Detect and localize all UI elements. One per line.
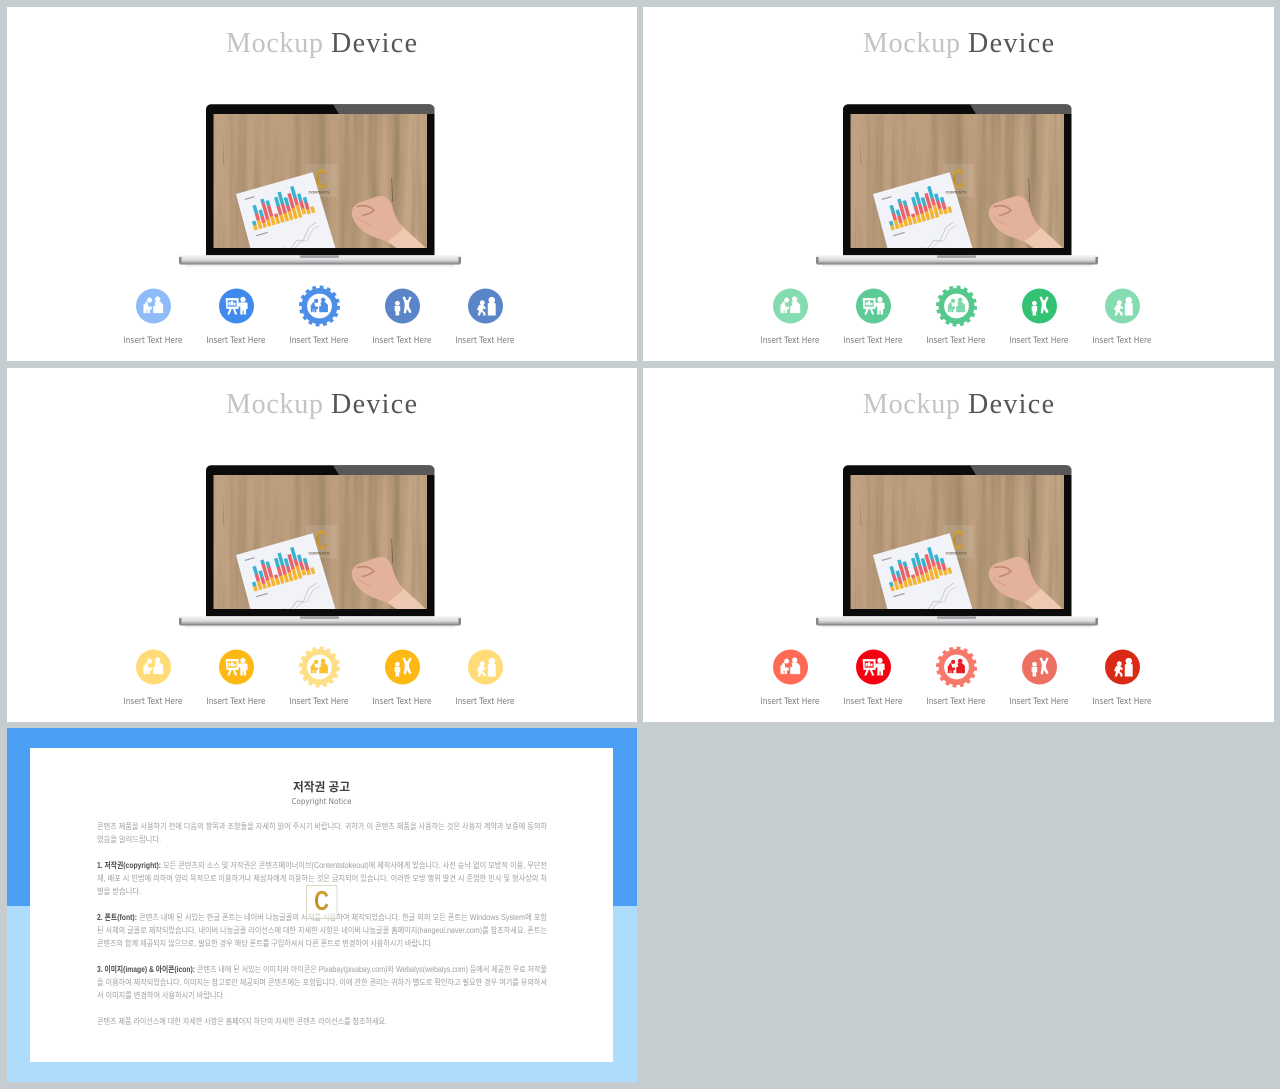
title	[226, 28, 417, 59]
section 1: copyright: 모든 콘텐츠의 소스 및 저작권은 콘텐츠메이너이브(Contentstokeout)에 제작사에게 있습니다. 사전 승낙 없이 모방적 이용, 무단전	[163, 860, 547, 870]
title: Mockup	[863, 28, 960, 59]
icon item 1	[760, 288, 820, 346]
icon item 1	[124, 288, 182, 346]
laptop mockup: CONTENTS	[946, 552, 967, 556]
section 2: font: 2. 폰트(font):	[97, 913, 137, 922]
icon item 3: gear: Insert Text Here	[926, 336, 986, 346]
icon item 2	[206, 650, 266, 707]
title	[863, 28, 1054, 59]
panel: red mockup slide	[643, 368, 1274, 722]
icon item 2: Insert Text Here	[844, 697, 902, 707]
closing line: 콘텐츠 제품 라이선스에 대한 자세한 사항은 홈페이지 하단의 자세한 콘텐츠 라이선스를 참조하세요.	[97, 1016, 387, 1026]
icon item 3: gear	[926, 648, 986, 707]
notice subheading: Copyright Notice	[292, 797, 352, 806]
logo watermark: C	[314, 886, 329, 917]
intro paragraph	[97, 821, 548, 844]
icon row	[124, 648, 514, 707]
icon item 3: gear	[290, 648, 348, 707]
icon item 1: Insert Text Here	[124, 336, 182, 346]
icon item 5: Insert Text Here	[456, 697, 514, 707]
title: Device	[968, 389, 1054, 420]
icon item 1	[760, 650, 820, 707]
icon item 3: gear: Insert Text Here	[290, 697, 348, 707]
notice heading: 저작권 공고	[293, 779, 350, 794]
title: Device	[331, 28, 417, 59]
icon item 2	[844, 650, 902, 707]
icon item 5: Insert Text Here	[456, 336, 514, 346]
laptop mockup: CONTENTS	[309, 190, 330, 194]
icon item 4: Insert Text Here	[1010, 697, 1068, 707]
icon item 2: Insert Text Here	[206, 336, 266, 346]
icon row	[760, 288, 1152, 346]
laptop mockup	[179, 104, 461, 266]
panel: blue mockup slide	[7, 7, 637, 361]
section 3: image and icon: 서 이미지를 변경하여 사용하시기 바랍니다.	[97, 990, 225, 1000]
laptop mockup: C	[316, 164, 327, 194]
icon item 4	[372, 650, 432, 707]
icon item 5	[1092, 650, 1152, 707]
icon item 3: gear: Insert Text Here	[290, 336, 348, 346]
icon item 5	[456, 288, 514, 346]
panel: green mockup slide	[643, 7, 1274, 361]
icon item 4: Insert Text Here	[372, 336, 432, 346]
title: Mockup	[863, 389, 960, 420]
icon item 3: gear	[926, 288, 986, 346]
icon item 4	[372, 288, 432, 346]
title: Device	[968, 28, 1054, 59]
laptop mockup	[179, 465, 461, 628]
section 2: font: 콘텐츠의 함께 제공되지 않으므로, 필요한 경우 해당 폰트를 구입하셔서 다른 폰트로 변경하여 사용하시기 바랍니다.	[97, 938, 433, 948]
section 3: image and icon	[97, 964, 547, 1000]
intro paragraph: 였음을 알려드립니다.	[97, 834, 161, 844]
icon item 3: gear: Insert Text Here	[926, 697, 986, 707]
title: Device	[331, 389, 417, 420]
section 2: font: 된 서체의 글꼴로 제작되었습니다. 네이버 나눔글꼴 라이선스에 대한 자세한 사항은 네이버 나눔글꼴 홈페이지(hangeul.naver.com)를 참조하세요. 폰트는	[97, 925, 547, 935]
icon item 1: Insert Text Here	[760, 336, 820, 346]
icon row	[124, 288, 514, 346]
laptop mockup	[816, 465, 1098, 628]
icon item 2	[206, 288, 266, 346]
laptop mockup: C	[953, 164, 964, 194]
icon item 4: Insert Text Here	[1010, 336, 1068, 346]
icon item 3: gear	[290, 288, 348, 346]
title: Mockup	[226, 389, 323, 420]
icon item 2: Insert Text Here	[206, 697, 266, 707]
section 1: copyright: 벌을 받습니다.	[97, 886, 141, 896]
section 1: copyright	[97, 860, 547, 896]
icon row	[760, 648, 1152, 707]
laptop mockup	[816, 104, 1098, 266]
laptop mockup: C	[953, 525, 964, 555]
section 3: image and icon: 을 이용하여 제작되었습니다. 이미지는 참고로만 제공되며 콘텐츠에는 포함됩니다. 이에 관한 권리는 귀하가 별도로 확인하고 필요한 경우 여기를 유의하셔	[97, 977, 547, 987]
section 2: font: 콘텐츠 내에 된 서있는 한글 폰트는 네이버 나눔글꼴의 서체를 사용하여 제작되었습니다. 한글 외의 모든 폰트는 Windows System에 포함	[139, 912, 548, 922]
title: Mockup	[226, 28, 323, 59]
icon item 4	[1010, 650, 1068, 707]
icon item 5: Insert Text Here	[1092, 336, 1152, 346]
icon item 5	[1092, 288, 1152, 346]
icon item 2: Insert Text Here	[844, 336, 902, 346]
laptop mockup: C	[316, 525, 327, 555]
section 2: font	[97, 912, 548, 948]
intro paragraph: 콘텐츠 제품을 사용하기 전에 다음의 항목과 조항들을 자세히 읽어 주시기 바랍니다. 귀하가 이 콘텐츠 제품을 사용하는 것은 사용자 계약과 보증에 동의하	[97, 821, 548, 831]
icon item 4: Insert Text Here	[372, 697, 432, 707]
icon item 5	[456, 650, 514, 707]
panel: copyright notice	[7, 728, 637, 1082]
section 3: image and icon: 3. 이미지(image) & 아이콘(icon):	[97, 964, 195, 974]
laptop mockup: CONTENTS	[946, 190, 967, 194]
section 1: copyright: 1. 저작권(copyright):	[97, 860, 161, 870]
section 1: copyright: 재, 배포 시 민법에 의하여 영리 목적으로 이용하거나 제삼자에게 이용하는 것은 금지되어 있습니다. 이러한 모방 행위 발견 시 준엄한 민사 및 형사상의 처	[97, 873, 547, 883]
icon item 1: Insert Text Here	[124, 697, 182, 707]
panel: yellow mockup slide	[7, 368, 637, 722]
title	[226, 389, 417, 420]
section 3: image and icon: 콘텐츠 내에 된 서있는 이미지와 아이콘은 Pixabay(pixabay.com)와 Webalys(webalys.com) 등에서 제공한 무료 저작물	[197, 964, 547, 974]
laptop mockup: CONTENTS	[309, 552, 330, 556]
icon item 1: Insert Text Here	[760, 697, 820, 707]
title	[863, 389, 1054, 420]
logo watermark	[306, 886, 337, 918]
icon item 1	[124, 650, 182, 707]
icon item 5: Insert Text Here	[1092, 697, 1152, 707]
icon item 2	[844, 288, 902, 346]
icon item 4	[1010, 288, 1068, 346]
